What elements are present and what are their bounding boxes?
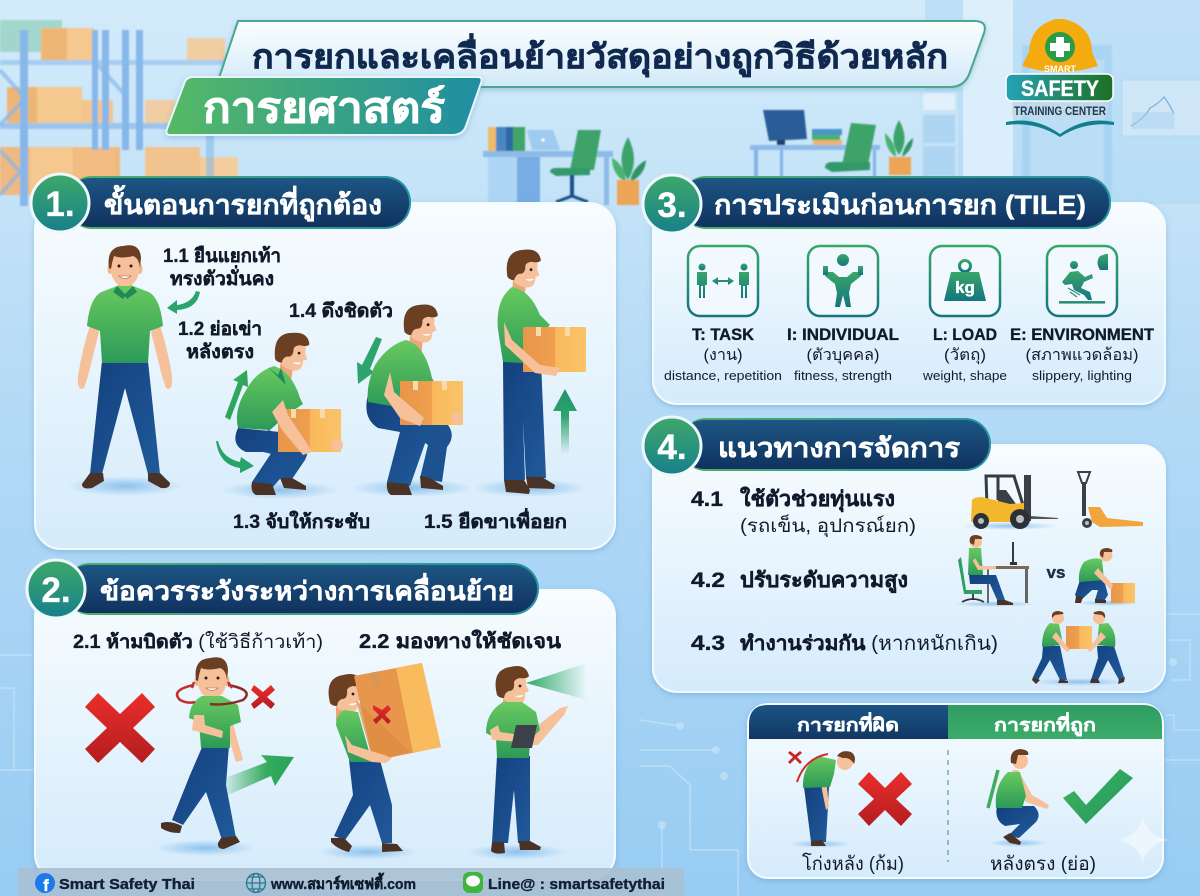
icon: check mark (1063, 769, 1133, 824)
figure: rising with box (350, 303, 474, 497)
heading 3: การประเมินก่อนการยก (TILE) (714, 190, 1086, 220)
figure: standing with box (472, 248, 588, 497)
heading 2: ข้อควรระวังระหว่างการเคลื่อนย้าย (100, 572, 514, 606)
heading 3: 3. (657, 186, 687, 225)
heading 1: 1. (45, 185, 75, 224)
heading 4: 4. (657, 428, 687, 467)
panel 3: TILE assessment (643, 175, 1165, 404)
logo: TRAINING CENTER (1014, 104, 1106, 118)
figure: kneeling lift (1075, 548, 1140, 606)
item L: load: L: LOAD (933, 325, 997, 344)
heading 1: ขั้นตอนการยกที่ถูกต้อง (104, 184, 382, 222)
item 4.1: (รถเข็น, อุปกรณ์ยก) (740, 513, 916, 538)
office desks (483, 45, 1112, 205)
label 1.1: ทรงตัวมั่นคง (170, 265, 274, 290)
subtitle banner (166, 77, 482, 135)
header: wrong lift: การยกที่ผิด (797, 712, 899, 735)
title banner (216, 21, 985, 87)
label 2.1: 2.1 ห้ามบิดตัว (ใช้วิธีก้าวเท้า) (73, 631, 323, 653)
figure: bent back (788, 751, 855, 848)
item 4.1: 4.1 (691, 488, 723, 511)
circuit traces (0, 614, 1200, 896)
icon: large cross (858, 772, 912, 826)
warehouse shelves and boxes (0, 20, 238, 206)
item I: individual (787, 246, 899, 383)
item I: individual: fitness, strength (794, 368, 892, 383)
icon: twist rotation arrows (177, 682, 247, 704)
item 4.1 (691, 486, 916, 538)
icon: small red cross (251, 685, 275, 709)
header: correct lift: การยกที่ถูก (994, 712, 1096, 737)
item 4.1: ใช้ตัวช่วยทุ่นแรง (740, 486, 895, 513)
item L: load (922, 246, 1007, 383)
line (463, 872, 665, 893)
facebook: Smart Safety Thai (59, 876, 195, 893)
decorative sparkle (1118, 816, 1168, 864)
comparison panel (748, 704, 1163, 878)
item 4.2: 4.2 (691, 569, 725, 592)
figure: twisting walker (155, 657, 255, 856)
heading 3 (643, 175, 1111, 233)
panel 2: precautions (27, 560, 615, 880)
label 1.2: 1.2 ย่อเข่า (178, 319, 262, 340)
icon: forklift (962, 475, 1058, 530)
label 2.2: 2.2 มองทางให้ชัดเจน (359, 629, 561, 653)
item E: environment (1010, 246, 1155, 383)
item L: load: weight, shape (922, 368, 1007, 383)
figure: carrying large box (318, 663, 441, 860)
arrow: step direction (225, 755, 294, 795)
figure: two people carrying box (1032, 611, 1128, 686)
item E: environment: E: ENVIRONMENT (1010, 325, 1155, 344)
item E: environment: (สภาพแวดล้อม) (1026, 346, 1138, 364)
figure: standing (67, 245, 183, 496)
facebook (35, 873, 195, 895)
header: wrong lift (749, 705, 948, 739)
label 1.5: 1.5 ยืดขาเพื่อยก (424, 508, 567, 533)
arrow 1.5 (553, 389, 577, 455)
item T: task: (งาน) (704, 347, 742, 364)
label: bent back: โก่งหลัง (ก้ม) (802, 852, 904, 875)
item I: individual: (ตัวบุคคล) (806, 347, 880, 365)
header: correct lift (948, 705, 1162, 739)
icon: pallet jack (1078, 472, 1143, 528)
arrows 1.2 and 1.4 (216, 337, 382, 473)
heading 1 (31, 174, 411, 232)
label 1.1 (163, 245, 281, 290)
heading 2 (27, 560, 539, 618)
item 4.3: 4.3 (691, 632, 725, 655)
website (246, 872, 416, 893)
wall chart (1122, 80, 1200, 136)
figure: squat with box (222, 330, 343, 499)
website: www.สมาร์ทเซฟตี้.com (270, 872, 416, 893)
title line 2: การยศาสตร์ (203, 85, 445, 131)
arrow 1.1 (167, 291, 200, 314)
item 4.2: ปรับระดับความสูง (740, 569, 908, 594)
item L: load: (วัตถุ) (944, 347, 986, 365)
text: vs: vs (1047, 563, 1065, 582)
item 4.2 (691, 569, 908, 594)
panel 4: management (643, 417, 1165, 692)
label 1.4: 1.4 ดึงชิดตัว (289, 300, 393, 322)
label 1.2: หลังตรง (186, 342, 254, 363)
item E: environment: slippery, lighting (1032, 368, 1132, 383)
heading 2: 2. (41, 571, 71, 610)
item T: task (664, 246, 782, 383)
item 4.3: ทำงานร่วมกัน (หากหนักเกิน) (740, 633, 998, 655)
item L: load: kg (955, 278, 975, 297)
logo: SAFETY (1021, 76, 1099, 101)
label: straight back: หลังตรง (ย่อ) (990, 854, 1096, 875)
item T: task: distance, repetition (664, 368, 782, 383)
icon: vision cone (526, 663, 587, 700)
item T: task: T: TASK (692, 325, 755, 344)
logo (1006, 19, 1114, 137)
facebook: f (43, 876, 49, 895)
label 1.1: 1.1 ยืนแยกเท้า (163, 245, 281, 267)
item I: individual: I: INDIVIDUAL (787, 325, 899, 344)
heading 4 (643, 417, 991, 475)
footer contact bar (18, 868, 684, 896)
figure: seated at desk (953, 535, 1037, 607)
label 1.2 (178, 319, 262, 363)
figure: looking ahead with tablet (467, 666, 568, 860)
heading 4: แนวทางการจัดการ (718, 433, 961, 463)
icon: large red cross (85, 693, 155, 763)
figure: straight back squat (988, 749, 1049, 847)
line: Line@ : smartsafetythai (488, 876, 665, 893)
panel 1: correct lifting steps (31, 174, 615, 549)
title line 1: การยกและเคลื่อนย้ายวัสดุอย่างถูกวิธีด้วยหลัก (252, 33, 948, 78)
label 1.3: 1.3 จับให้กระชับ (233, 510, 370, 533)
logo: SMART (1044, 64, 1076, 74)
